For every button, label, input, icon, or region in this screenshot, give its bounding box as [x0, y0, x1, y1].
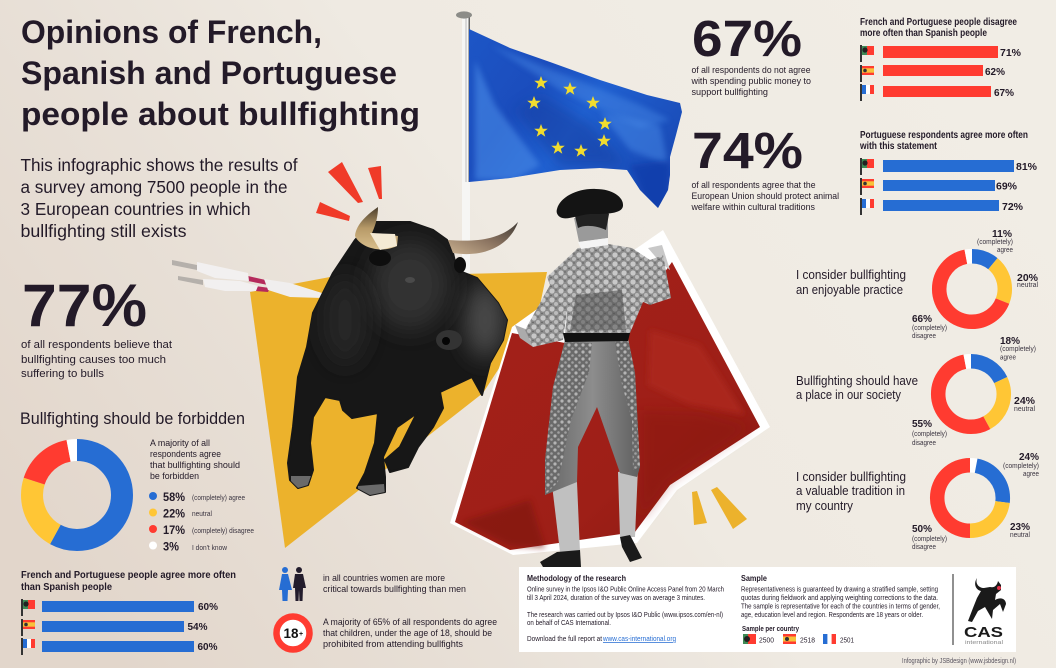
donut: place in society: 55% — [912, 419, 932, 430]
statement: enjoyable practice — [796, 268, 906, 297]
bar chart: agree by country: 54% — [188, 622, 208, 633]
donut: valuable tradition: 23% — [1010, 522, 1030, 533]
bar chart: disagree by country: more often than Spanish people — [860, 28, 987, 39]
banderillas — [172, 260, 322, 298]
sample text — [741, 573, 940, 619]
donut: valuable tradition: 50% — [912, 524, 932, 535]
legend: I don't know — [192, 545, 228, 552]
logo: CAS International: international — [965, 640, 1003, 646]
logo: CAS International — [964, 578, 1006, 646]
sample per country — [742, 624, 854, 644]
sample text: Representativeness is guaranteed by drawing a stratified sample, setting — [741, 584, 938, 594]
donut: valuable tradition: disagree — [912, 544, 936, 551]
stat: 74%: 74% — [692, 122, 803, 179]
stat: 77%: of all respondents believe that — [21, 339, 172, 351]
donut: enjoyable practice: (completely) — [912, 325, 947, 332]
bar chart: agree by country — [21, 570, 236, 655]
text: under 18: that children, under the age of 18, should be — [323, 628, 492, 639]
statement: valuable tradition — [796, 470, 906, 513]
methodology text: till 3 April 2024, duration of the survey was on average 3 minutes. — [527, 593, 705, 602]
sample per country: Sample per country — [742, 624, 800, 633]
icon: 18+ — [276, 616, 310, 650]
text: women more critical: critical towards bullfighting than men — [323, 584, 466, 595]
sample text: Sample — [741, 573, 767, 583]
donut: should be forbidden — [32, 450, 122, 540]
yellow backdrop shape — [250, 272, 547, 548]
legend: neutral — [192, 511, 212, 518]
bar chart: disagree by country: 62% — [985, 67, 1005, 78]
bar chart: EU statement by country: with this statement — [859, 141, 938, 152]
stat: 77%: bullfighting causes too much — [21, 354, 166, 366]
donut: place in society: disagree — [912, 440, 936, 447]
donut: place in society: (completely) — [1000, 346, 1036, 353]
legend: 22% — [163, 506, 185, 520]
title: Spanish and Portuguese — [21, 55, 397, 91]
logo: CAS International: CAS — [964, 624, 1003, 641]
icon: 18+: 18 — [284, 626, 299, 641]
donut: place in society: (completely) — [912, 431, 947, 438]
donut: valuable tradition: (completely) — [912, 536, 947, 543]
title: Opinions of French, — [21, 14, 322, 50]
bar chart: EU statement by country: 72% — [1002, 202, 1023, 213]
donut: place in society: 24% — [1014, 396, 1035, 407]
bar chart: disagree by country: 71% — [1000, 48, 1021, 59]
stat: 74%: European Union should protect animal — [692, 191, 839, 202]
stat: 77% — [21, 272, 172, 380]
text: under 18: prohibited from attending bullfights — [323, 639, 463, 650]
methodology text: Online survey in the Ipsos I&O Public Online Access Panel from 20 March — [527, 584, 724, 594]
sample text: The sample is representative for each of the countries in terms of gender, — [741, 602, 940, 611]
stat: 74%: welfare within cultural traditions — [691, 202, 815, 213]
icon: yellow burst spikes — [692, 487, 747, 529]
majority text: that bullfighting should — [150, 460, 240, 471]
methodology text: on behalf of CAS International. — [527, 618, 611, 627]
methodology text: The research was carried out by Ipsos I&O Public (www.ipsos.com/en-nl) — [527, 610, 723, 619]
donut: enjoyable practice: 20% — [1017, 273, 1038, 284]
donut: valuable tradition — [912, 452, 1039, 551]
divider — [952, 574, 954, 645]
stat: 77%: 77% — [22, 272, 147, 339]
statement: valuable tradition: my country — [796, 499, 854, 513]
stat: 74% — [691, 122, 839, 213]
majority text — [150, 438, 240, 482]
donut: place in society: 18% — [1000, 336, 1020, 347]
bar chart: disagree by country: 67% — [994, 88, 1014, 99]
methodology text: Download the full report at — [527, 634, 603, 643]
donut: enjoyable practice: disagree — [912, 333, 936, 340]
icon: woman and man — [279, 567, 306, 601]
donut: enjoyable practice: neutral — [1017, 282, 1038, 289]
bar chart: agree by country: French and Portuguese people agree more often — [21, 570, 236, 581]
donut: place in society: agree — [1000, 354, 1016, 362]
bar chart: agree by country: 60% — [198, 602, 218, 613]
legend: 58% — [163, 490, 185, 504]
text: women more critical: in all countries women are more — [323, 573, 445, 584]
legend: (completely) agree — [192, 495, 245, 502]
statement: place in society: a place in our society — [796, 388, 902, 402]
sample text: age, education level and region. Respondents are 18 years or older. — [741, 610, 923, 619]
sample text: quotas during fieldwork and applying weighting corrections to the data. — [741, 593, 938, 602]
stat: 67%: of all respondents do not agree — [692, 65, 810, 76]
stat: 67%: 67% — [692, 10, 802, 67]
methodology text — [527, 573, 724, 643]
intro text: bullfighting still exists — [20, 221, 187, 241]
donut: place in society — [912, 336, 1036, 447]
stat: 67%: with spending public money to — [691, 76, 811, 87]
intro text — [20, 155, 298, 241]
majority text: A majority of all — [150, 438, 210, 449]
sample per country: 2518 — [800, 636, 815, 644]
bar chart: EU statement by country: Portuguese respondents agree more often — [860, 130, 1028, 141]
legend: 17% — [163, 523, 185, 537]
text: women more critical — [323, 573, 466, 595]
majority text: be forbidden — [150, 471, 199, 482]
cape — [450, 230, 770, 555]
intro text: This infographic shows the results of — [20, 155, 298, 175]
donut: valuable tradition: 24% — [1019, 452, 1039, 463]
donut: valuable tradition: (completely) — [1003, 463, 1039, 470]
majority text: respondents agree — [150, 449, 221, 460]
statement: place in society — [796, 374, 918, 402]
matador — [515, 189, 671, 567]
donut: enjoyable practice: agree — [997, 247, 1013, 254]
credit: Infographic by JSBdesign (www.jsbdesign.nl) — [902, 656, 1016, 665]
EU flag — [469, 29, 682, 210]
statement: enjoyable practice: an enjoyable practice — [796, 283, 903, 297]
bar chart: agree by country: than Spanish people — [21, 582, 112, 593]
stat: 67% — [691, 10, 811, 98]
donut: enjoyable practice: 11% — [992, 229, 1012, 240]
text: under 18 — [323, 617, 497, 650]
panel: methodology and sample — [519, 567, 1016, 652]
donut: enjoyable practice: 66% — [912, 314, 932, 325]
donut: valuable tradition: neutral — [1010, 532, 1030, 539]
bar chart: EU statement by country: 81% — [1016, 162, 1037, 173]
donut: place in society: neutral — [1014, 406, 1035, 413]
statement: enjoyable practice: I consider bullfighting — [796, 268, 906, 282]
icon: 18+: + — [299, 631, 303, 638]
donut: enjoyable practice — [912, 229, 1038, 340]
stat: 74%: of all respondents agree that the — [692, 180, 816, 191]
sample per country: 2500 — [759, 636, 774, 644]
text: under 18: A majority of 65% of all respondents do agree — [323, 617, 497, 628]
bull — [288, 207, 518, 495]
stat: 77%: suffering to bulls — [21, 368, 105, 380]
bar chart: disagree by country — [860, 17, 1021, 101]
statement: valuable tradition: a valuable tradition in — [796, 484, 905, 498]
donut: valuable tradition: agree — [1023, 471, 1039, 478]
sample per country: 2501 — [840, 636, 854, 644]
stat: 67%: support bullfighting — [692, 87, 768, 98]
legend: (completely) disagree — [192, 528, 254, 535]
donut: enjoyable practice: (completely) — [977, 239, 1013, 246]
bar chart: disagree by country: French and Portuguese people disagree — [860, 17, 1017, 28]
bar chart: EU statement by country: 69% — [996, 182, 1017, 192]
intro text: 3 European countries in which — [20, 199, 250, 219]
methodology text: www.cas-international.org — [602, 634, 676, 643]
title: people about bullfighting — [21, 96, 420, 132]
legend: 3% — [163, 540, 179, 554]
legend — [149, 490, 254, 554]
methodology text: Methodology of the research — [527, 573, 626, 583]
bar chart: EU statement by country — [859, 130, 1037, 215]
flagpole — [456, 11, 472, 273]
statement: place in society: Bullfighting should have — [796, 374, 918, 388]
title — [21, 14, 420, 132]
heading: should be forbidden: Bullfighting should be forbidden — [20, 409, 245, 428]
bar chart: agree by country: 60% — [198, 642, 218, 653]
intro text: a survey among 7500 people in the — [20, 177, 288, 197]
statement: valuable tradition: I consider bullfighting — [796, 470, 906, 484]
icon: red burst spikes — [316, 162, 382, 221]
